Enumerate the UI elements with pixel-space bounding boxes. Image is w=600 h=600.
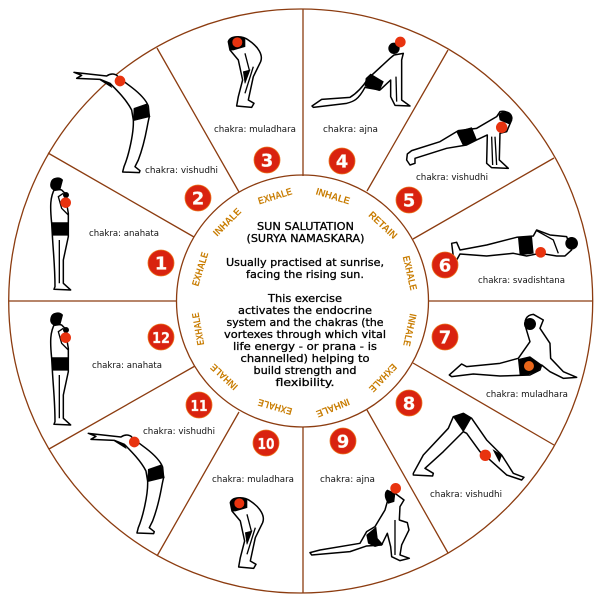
center intro text — [226, 256, 384, 281]
figure: eight-point prone — [452, 230, 578, 260]
figure: standing prayer — [51, 313, 71, 425]
center title: SUN SALUTATION — [257, 220, 354, 233]
figure: forward bend — [230, 498, 263, 568]
breath labels ring — [191, 186, 418, 419]
number badge 7: 7 — [439, 328, 451, 348]
panel: pose 11 — [88, 392, 215, 534]
number badge 7 — [432, 324, 458, 350]
panel: pose 10 — [212, 430, 294, 568]
center description: build strength and — [254, 364, 356, 377]
breath labels ring: EXHALE — [400, 255, 418, 292]
figure: cobra — [449, 314, 577, 378]
breath labels ring: INHALE — [314, 187, 351, 207]
figure: raised arms backbend — [88, 433, 164, 534]
figure: raised arms backbend — [74, 72, 150, 173]
breath labels ring: EXHALE — [191, 251, 211, 288]
chakra label: chakra: vishudhi — [143, 427, 215, 437]
panel: pose 1 — [51, 178, 174, 290]
number badge 11 — [186, 392, 212, 418]
number badge 4: 4 — [336, 152, 348, 172]
panel: pose 5 — [396, 111, 512, 213]
center description: vortexes through which vital — [224, 328, 386, 341]
number badge 2: 2 — [192, 188, 204, 210]
center intro text: Usually practised at sunrise, — [226, 256, 384, 269]
panel: pose 6 — [432, 230, 578, 286]
breath labels ring: INHALE — [314, 395, 351, 419]
panel: pose 4 — [312, 37, 410, 174]
figure: standing prayer — [51, 178, 71, 290]
chakra label: chakra: vishudhi — [416, 173, 488, 183]
number badge 9: 9 — [337, 432, 349, 452]
panel: pose 8 — [396, 390, 524, 500]
panel: pose 12 — [51, 313, 174, 425]
breath labels ring: INHALE — [400, 313, 418, 347]
chakra label: chakra: anahata — [89, 229, 159, 239]
figure: lunge with forward knee — [310, 483, 409, 561]
breath labels ring: EXHALE — [257, 186, 294, 207]
number badge 1: 1 — [155, 254, 167, 274]
center description: This exercise — [267, 292, 342, 305]
chakra label: chakra: muladhara — [212, 475, 294, 485]
center description: system and the chakras (the — [226, 316, 384, 329]
figure: equestrian lunge — [312, 37, 410, 107]
number badge 3: 3 — [261, 150, 273, 172]
chakra label: chakra: vishudhi — [430, 490, 502, 500]
center intro text: facing the rising sun. — [246, 268, 364, 281]
number badge 6 — [432, 252, 458, 278]
figure: downward dog — [413, 413, 524, 480]
center title — [246, 220, 364, 245]
figure: plank — [407, 111, 512, 168]
center description: channelled) helping to — [240, 352, 370, 365]
number badge 11: 11 — [190, 397, 208, 415]
panel: pose 9 — [310, 428, 409, 561]
chakra label: chakra: muladhara — [214, 125, 296, 135]
chakra label: chakra: anahata — [92, 361, 162, 371]
panel: pose 7 — [432, 314, 577, 400]
number badge 2 — [185, 185, 211, 211]
number badge 5: 5 — [403, 190, 415, 212]
chakra label: chakra: svadishtana — [478, 276, 565, 286]
center description: activates the endocrine — [238, 304, 372, 317]
center description: flexibility. — [276, 376, 334, 389]
number badge 6: 6 — [439, 256, 451, 276]
breath labels ring: EXHALE — [191, 311, 207, 346]
breath labels ring: RETAIN — [366, 210, 399, 242]
breath labels ring: EXHALE — [366, 361, 398, 394]
number badge 10: 10 — [258, 435, 274, 453]
chakra label: chakra: vishudhi — [145, 166, 218, 176]
breath labels ring: INHALE — [211, 206, 244, 239]
panel: pose 3 — [214, 37, 296, 173]
center description: life energy - or prana - is — [233, 340, 377, 353]
breath labels ring: EXHALE — [257, 396, 294, 416]
chakra label: chakra: ajna — [320, 475, 375, 485]
panel: pose 2 — [74, 72, 218, 211]
number badge 8: 8 — [403, 394, 415, 414]
number badge 12: 12 — [152, 329, 170, 347]
chakra label: chakra: muladhara — [486, 390, 568, 400]
center description — [224, 292, 386, 389]
breath labels ring: INHALE — [209, 361, 241, 392]
chakra label: chakra: ajna — [323, 125, 378, 135]
center title: (SURYA NAMASKARA) — [246, 232, 364, 245]
figure: forward bend — [228, 37, 261, 107]
